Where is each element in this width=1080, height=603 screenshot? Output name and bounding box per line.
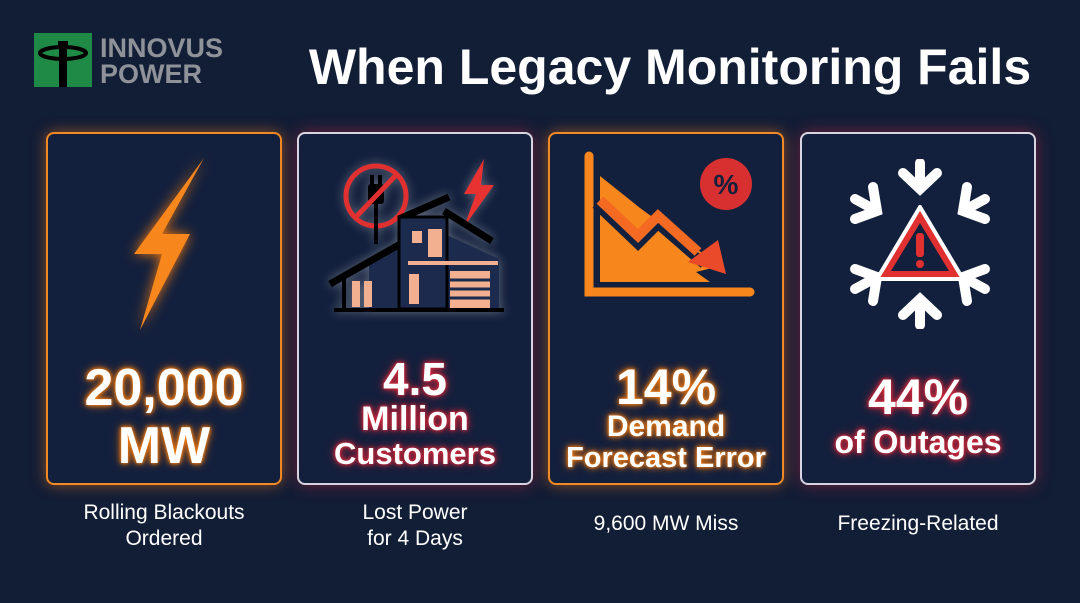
- caption: rolling blackouts: Rolling Blackouts: [83, 501, 245, 524]
- stat: 20,000 MW: [80, 359, 248, 475]
- panel: customers: [297, 132, 533, 485]
- icon: house outage: [326, 158, 507, 318]
- icon: snowflake warning: [850, 159, 990, 329]
- stat: 4.5 million customers: 4.5: [383, 353, 447, 405]
- caption: lost power: for 4 Days: [367, 527, 463, 550]
- panel: freezing: of Outages: [834, 424, 1002, 460]
- caption: 9,600 MW: 9,600 MW Miss: [594, 512, 738, 535]
- panel: customers: Customers: [334, 436, 496, 471]
- icon: falling chart: [584, 152, 754, 296]
- logo mark: [34, 33, 92, 87]
- stat: 14% demand forecast error: 14%: [616, 359, 716, 415]
- stat: 20,000 MW: MW: [118, 417, 210, 475]
- panel: freezing: [800, 132, 1036, 485]
- caption: rolling blackouts: Ordered: [125, 527, 203, 550]
- panel: forecast: [548, 132, 784, 485]
- caption: lost power: [362, 501, 468, 550]
- title: When Legacy Monitoring Fails: [309, 39, 1031, 95]
- panel: customers: Million: [361, 400, 469, 438]
- logo: [34, 33, 223, 89]
- icon: falling chart: %: [714, 169, 739, 200]
- logo text: POWER: [100, 59, 202, 89]
- stat: 20,000 MW: 20,000: [84, 359, 244, 417]
- panel: blackouts: [46, 132, 282, 485]
- panel: forecast: Forecast Error: [566, 442, 766, 474]
- caption: freezing: Freezing-Related: [837, 512, 999, 535]
- stat: 44% of outages: 44%: [868, 369, 968, 425]
- icon: lightning: [128, 158, 205, 330]
- logo text: INNOVUS: [100, 33, 223, 63]
- logo text: [100, 33, 223, 89]
- caption: rolling blackouts: [83, 501, 245, 550]
- panel: forecast: Demand: [607, 410, 725, 443]
- caption: lost power: Lost Power: [362, 501, 468, 524]
